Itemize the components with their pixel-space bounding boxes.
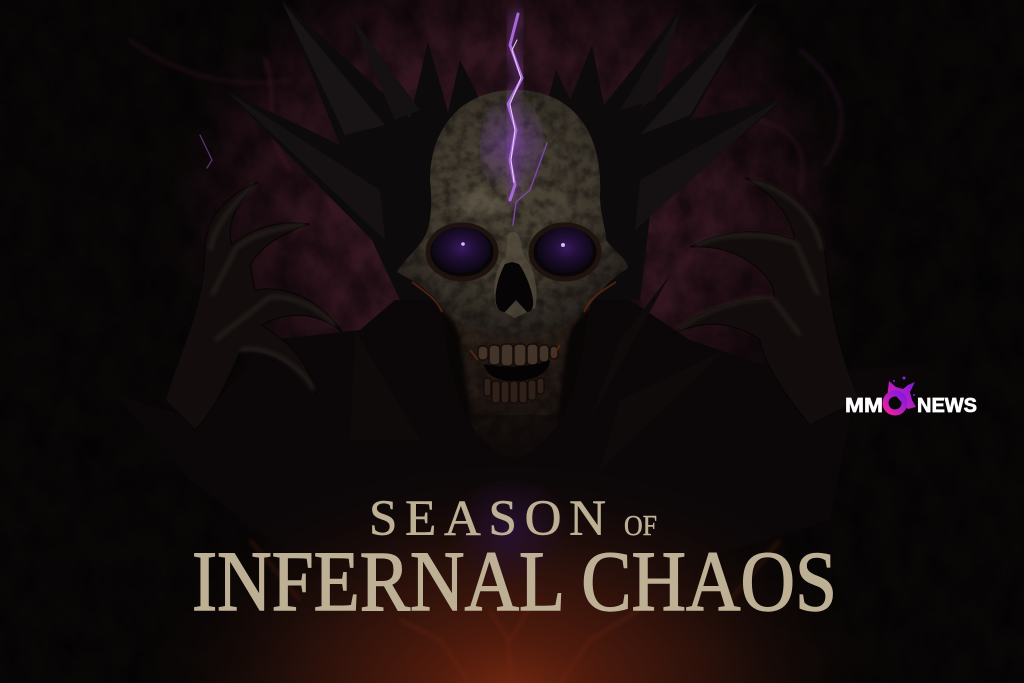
icon: logo ring [886,394,904,412]
right claw hand [672,178,860,425]
ember edges of the jaw [412,282,616,360]
ember glow rising through the cloak [0,420,1024,683]
lower teeth [484,378,544,403]
dark cloak and shoulders [115,275,925,600]
icon: logo crown splash [887,381,916,409]
eye sockets [428,225,496,279]
upper teeth [478,344,558,366]
title line: season: SEASON [369,491,606,547]
title line: infernal chaos: INFERNAL CHAOS [192,533,837,629]
cheek hollows [441,308,470,417]
spiked crown behind skull [225,0,785,300]
nose cavity [494,232,537,318]
forehead cracks [440,120,576,255]
skull base shape with rock texture [397,90,628,434]
skull [397,90,628,434]
background wisps of purple energy [130,40,841,190]
violet glow on forehead [480,94,544,202]
icon: logo dots [893,376,915,396]
icon: glowing violet eyes [432,227,593,273]
title word: of: OF [624,510,657,542]
logo: mmo news [845,376,977,417]
purple lightning bolt [508,14,547,225]
logo word: mm: MM [845,395,883,417]
logo word: news: NEWS [917,395,977,417]
title [192,491,837,629]
left claw hand [165,182,342,430]
open mouth [484,360,550,381]
brow highlights [458,190,502,216]
bottom jaw fade [486,420,489,424]
